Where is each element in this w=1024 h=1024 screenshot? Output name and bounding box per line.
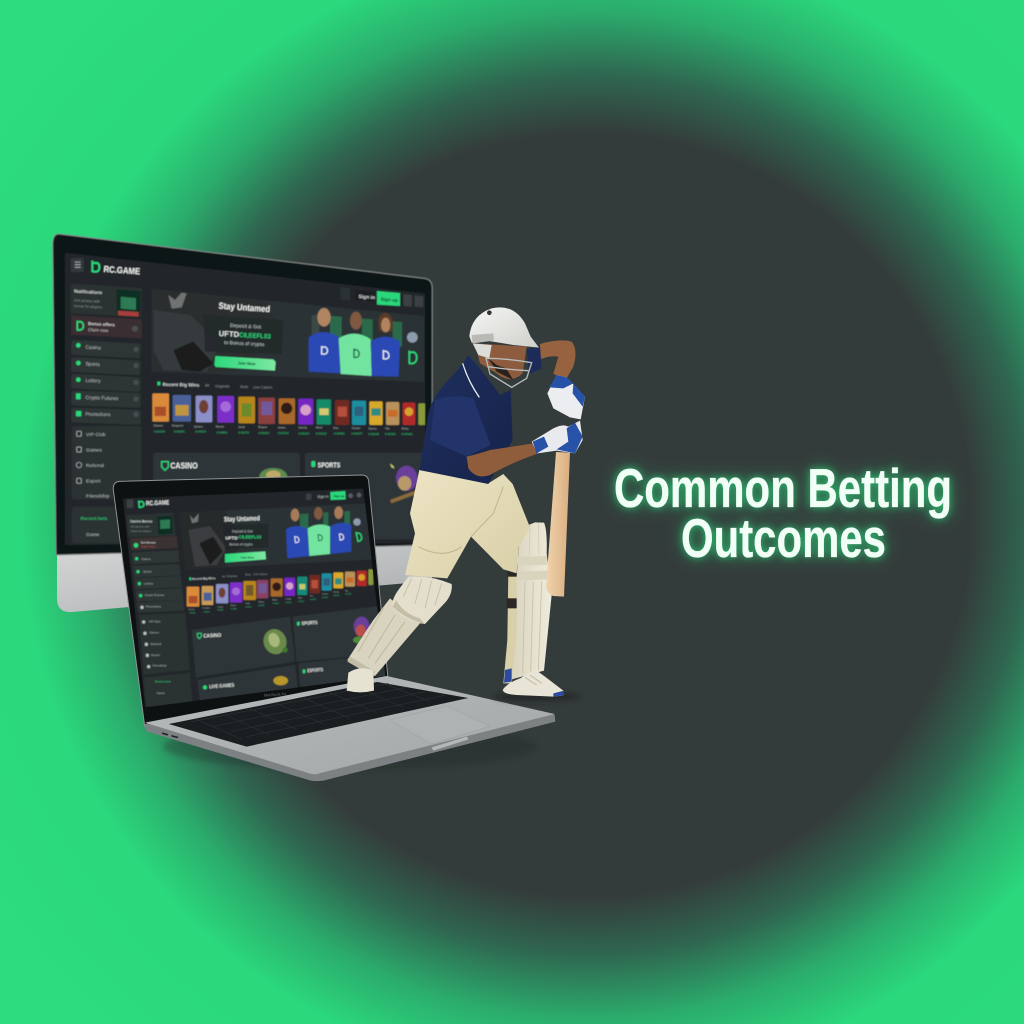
monitor game captions: Mystic [216, 425, 225, 429]
laptop drop shadow [163, 723, 537, 770]
laptop game section heading: Recent Big Wins [192, 576, 216, 581]
monitor game captions: 0.01231 [238, 431, 249, 435]
laptop hero banner: Stay Untamed [224, 515, 260, 524]
laptop header and logo: RC.GAME [146, 500, 169, 507]
monitor game captions: Ocean [352, 426, 361, 430]
laptop sidebar [126, 513, 193, 707]
title line 2: Outcomes [681, 507, 886, 569]
laptop game captions: 0.0025 [203, 611, 210, 613]
monitor game section heading: Originals [215, 384, 230, 388]
laptop game captions: 0.0031 [273, 603, 279, 605]
monitor game captions: 0.00214 [298, 431, 309, 435]
monitor sidebar: Friendship [86, 493, 109, 499]
laptop game thumbnails row [187, 569, 373, 614]
monitor game section heading [157, 382, 272, 390]
laptop game captions: Dragons [203, 607, 210, 610]
laptop esports panel: ESPORTS [307, 667, 324, 674]
monitor game captions: Sunny [368, 426, 377, 430]
monitor sidebar: Games [86, 448, 103, 454]
laptop esports panel [298, 654, 389, 705]
monitor sidebar: Game [86, 532, 100, 538]
monitor casino panel: CASINO [170, 462, 198, 471]
beard [488, 358, 513, 380]
monitor game captions: 0.00127 [352, 432, 363, 436]
monitor game captions: Rogue [258, 425, 267, 429]
laptop sidebar: Crypto Futures [145, 593, 165, 597]
monitor game captions: 0.00251 [174, 429, 185, 433]
laptop game captions: Classic [188, 609, 195, 611]
monitor game captions: 0.00423 [258, 431, 269, 435]
laptop hero banner: Deposit & Get [232, 530, 253, 534]
laptop base deck [145, 676, 555, 781]
helmet face grille [486, 358, 532, 387]
laptop game captions: Ocean [322, 594, 328, 596]
laptop sidebar: VIP Club [149, 620, 161, 624]
monitor sidebar: Claim now [88, 327, 109, 333]
laptop header and logo [127, 491, 361, 508]
cricket bat [546, 452, 570, 597]
monitor sidebar: Recent bets [81, 516, 108, 522]
laptop live games panel: LIVE GAMES [209, 683, 235, 690]
monitor casino panel [154, 453, 300, 480]
monitor sidebar: Promotions [85, 412, 111, 418]
laptop hero banner: UFTD [225, 535, 238, 540]
laptop hero banner: Join Now [241, 555, 255, 559]
laptop game section heading: Slots [245, 573, 252, 577]
laptop game captions: Fire [310, 595, 314, 598]
polo shirt [419, 355, 513, 484]
monitor hero banner: UFTD [219, 329, 240, 339]
laptop live games panel [197, 665, 300, 707]
monitor sports panel [305, 453, 427, 539]
monitor hero banner: Stay Untamed [218, 301, 270, 314]
laptop header and logo: Sign in [317, 495, 329, 499]
monitor sidebar: bonus for players [74, 304, 102, 309]
monitor banner three footballers [309, 308, 418, 377]
monitor sidebar: VIP Club [86, 432, 106, 438]
monitor game captions: 0.00891 [217, 430, 228, 434]
laptop front notch [432, 737, 469, 751]
laptop game captions: Mystic [231, 604, 236, 607]
laptop sidebar: Casino Bonus [130, 520, 153, 524]
laptop ports [163, 733, 177, 737]
monitor sidebar: Lottery [85, 378, 101, 385]
laptop sidebar: Game [157, 691, 165, 695]
monitor header and logo [71, 258, 140, 277]
monitor top-right account controls: Sign up [381, 297, 398, 303]
monitor sidebar: Casino [85, 345, 101, 351]
monitor sidebar: Bonus offers [88, 321, 115, 327]
monitor sidebar [71, 283, 142, 543]
laptop sidebar: Casino [141, 557, 151, 561]
monitor game captions: 0.04310 [195, 430, 206, 434]
cricket batsman [347, 307, 585, 701]
monitor hero banner: Join Now [238, 360, 256, 366]
laptop game captions: 0.0042 [258, 605, 264, 607]
monitor game section heading: Slots [240, 385, 248, 389]
monitor game captions: Dragons [172, 424, 184, 428]
monitor game section heading: Recent Big Wins [163, 382, 200, 388]
back leg batting pad [512, 522, 552, 679]
laptop lid and bezel [113, 475, 388, 726]
laptop banner three footballers [286, 506, 362, 558]
player ground shadow [493, 692, 580, 701]
monitor game thumbnails row [152, 393, 426, 425]
monitor top-right account controls: Sign in [358, 294, 375, 301]
laptop sidebar: Lottery [144, 581, 154, 585]
monitor game captions: Candy [298, 426, 307, 430]
laptop game section heading: Live Casino [253, 572, 268, 576]
laptop sports panel [293, 606, 385, 662]
monitor silver chin [57, 541, 432, 612]
monitor game captions: Aztec [278, 425, 286, 429]
monitor game captions: Classic [153, 424, 163, 428]
laptop game captions: Reef [298, 598, 303, 600]
laptop game captions: Gold [245, 603, 250, 605]
laptop game captions: Aztec [273, 599, 278, 602]
monitor game captions: 0.00312 [278, 431, 289, 435]
laptop game captions: 0.0123 [245, 606, 252, 608]
upper glove [547, 375, 585, 419]
monitor hero banner: C8,EEFL03 [239, 332, 271, 341]
laptop trackpad [390, 706, 490, 744]
laptop mockup [113, 475, 555, 781]
laptop game captions: 0.0012 [322, 597, 328, 599]
title: Common Betting Outcomes [614, 457, 952, 569]
laptop game section heading: Originals [227, 574, 238, 578]
laptop sidebar: Sports [143, 570, 152, 574]
shirt sleeve and collar trim [430, 363, 491, 457]
laptop game captions [188, 590, 352, 614]
laptop keyboard [169, 682, 468, 747]
laptop casino panel: CASINO [203, 633, 221, 640]
monitor top-right account controls [341, 287, 423, 307]
monitor sidebar: Referral [86, 463, 104, 469]
lower glove [532, 421, 583, 453]
monitor hero banner: Deposit & Get [230, 323, 262, 331]
laptop hero banner: Bonus of crypto [229, 542, 253, 546]
monitor header and logo: RC.GAME [103, 264, 140, 277]
trousers [405, 470, 530, 578]
monitor sidebar: Notifications [74, 289, 103, 295]
laptop game captions: Candy [285, 599, 291, 601]
laptop sidebar: Recent bets [155, 680, 171, 684]
laptop game captions: 0.0021 [285, 602, 291, 604]
monitor sidebar: Export [86, 479, 101, 485]
laptop game captions: 0.0036 [345, 594, 352, 596]
laptop game captions: 0.0431 [217, 610, 223, 612]
desktop monitor mockup [53, 234, 432, 612]
helmet [469, 307, 539, 358]
monitor game captions: 0.00412 [402, 432, 413, 436]
laptop hero banner [179, 503, 374, 569]
laptop game captions: Rogue [258, 602, 265, 604]
front shoe [347, 668, 374, 692]
right sleeve [527, 347, 542, 374]
monitor sidebar: Crypto Futures [85, 395, 119, 402]
laptop game section heading [189, 572, 268, 581]
monitor sidebar: Sports [85, 361, 100, 368]
laptop game captions: Tiki [345, 590, 349, 592]
monitor game captions: Gold [238, 425, 245, 429]
monitor game captions: 0.00241 [368, 432, 379, 436]
laptop game captions: Sunny [333, 592, 339, 594]
front leg batting pad [347, 576, 452, 677]
monitor game captions: Fire [333, 426, 339, 430]
monitor game captions: 0.00361 [385, 432, 396, 436]
laptop game section heading: All [222, 575, 225, 579]
monitor sidebar: Get access with [74, 298, 100, 304]
laptop game captions: 0.0112 [298, 601, 304, 603]
monitor game captions: 0.00134 [154, 429, 165, 433]
monitor game captions: 0.01122 [316, 432, 327, 436]
laptop sidebar: Referral [151, 642, 162, 646]
laptop game captions: 0.0045 [310, 599, 317, 601]
monitor game captions: Queen [194, 424, 203, 428]
monitor game captions: Tiki [385, 426, 390, 430]
monitor sports panel: SPORTS [318, 460, 340, 469]
monitor hero banner: to Bonus of crypto [224, 340, 265, 348]
laptop sidebar: Games [149, 631, 159, 635]
laptop game captions: Queen [217, 606, 223, 608]
back leg [503, 571, 520, 683]
right upper arm [540, 340, 575, 378]
laptop sidebar: Get access with [131, 525, 150, 529]
laptop game captions: 0.0013 [189, 612, 196, 614]
laptop sidebar: Friendship [153, 664, 167, 668]
laptop sidebar: Get Bonus [141, 540, 156, 544]
laptop game captions: 0.0089 [231, 608, 238, 610]
monitor game section heading: Live Casino [253, 386, 272, 390]
trouser fold shading [418, 487, 503, 553]
monitor screen content [53, 234, 432, 555]
laptop header and logo: Sign up [333, 494, 344, 498]
laptop casino panel [192, 617, 295, 677]
laptop hero banner: C8,EEFL03 [239, 535, 262, 540]
monitor hero banner [152, 289, 424, 382]
back shoe [503, 669, 564, 697]
laptop sidebar: Promotions [146, 604, 162, 608]
monitor game captions: 0.00451 [334, 432, 345, 436]
laptop sidebar: bonus for players [131, 529, 152, 533]
forearm [467, 443, 537, 476]
laptop sidebar: Export [151, 653, 160, 657]
monitor game section heading: All [205, 384, 209, 388]
laptop game captions: 0.0024 [333, 595, 340, 597]
monitor game captions: Ruby [402, 426, 409, 430]
monitor game captions: Reef [316, 426, 322, 430]
laptop sidebar: Claim now [141, 544, 156, 548]
monitor game captions [153, 424, 413, 436]
laptop screen content [123, 488, 389, 707]
laptop brand label on bezel: MacBook Air [264, 691, 287, 698]
head and face [475, 343, 527, 379]
laptop sports panel: SPORTS [301, 620, 318, 627]
